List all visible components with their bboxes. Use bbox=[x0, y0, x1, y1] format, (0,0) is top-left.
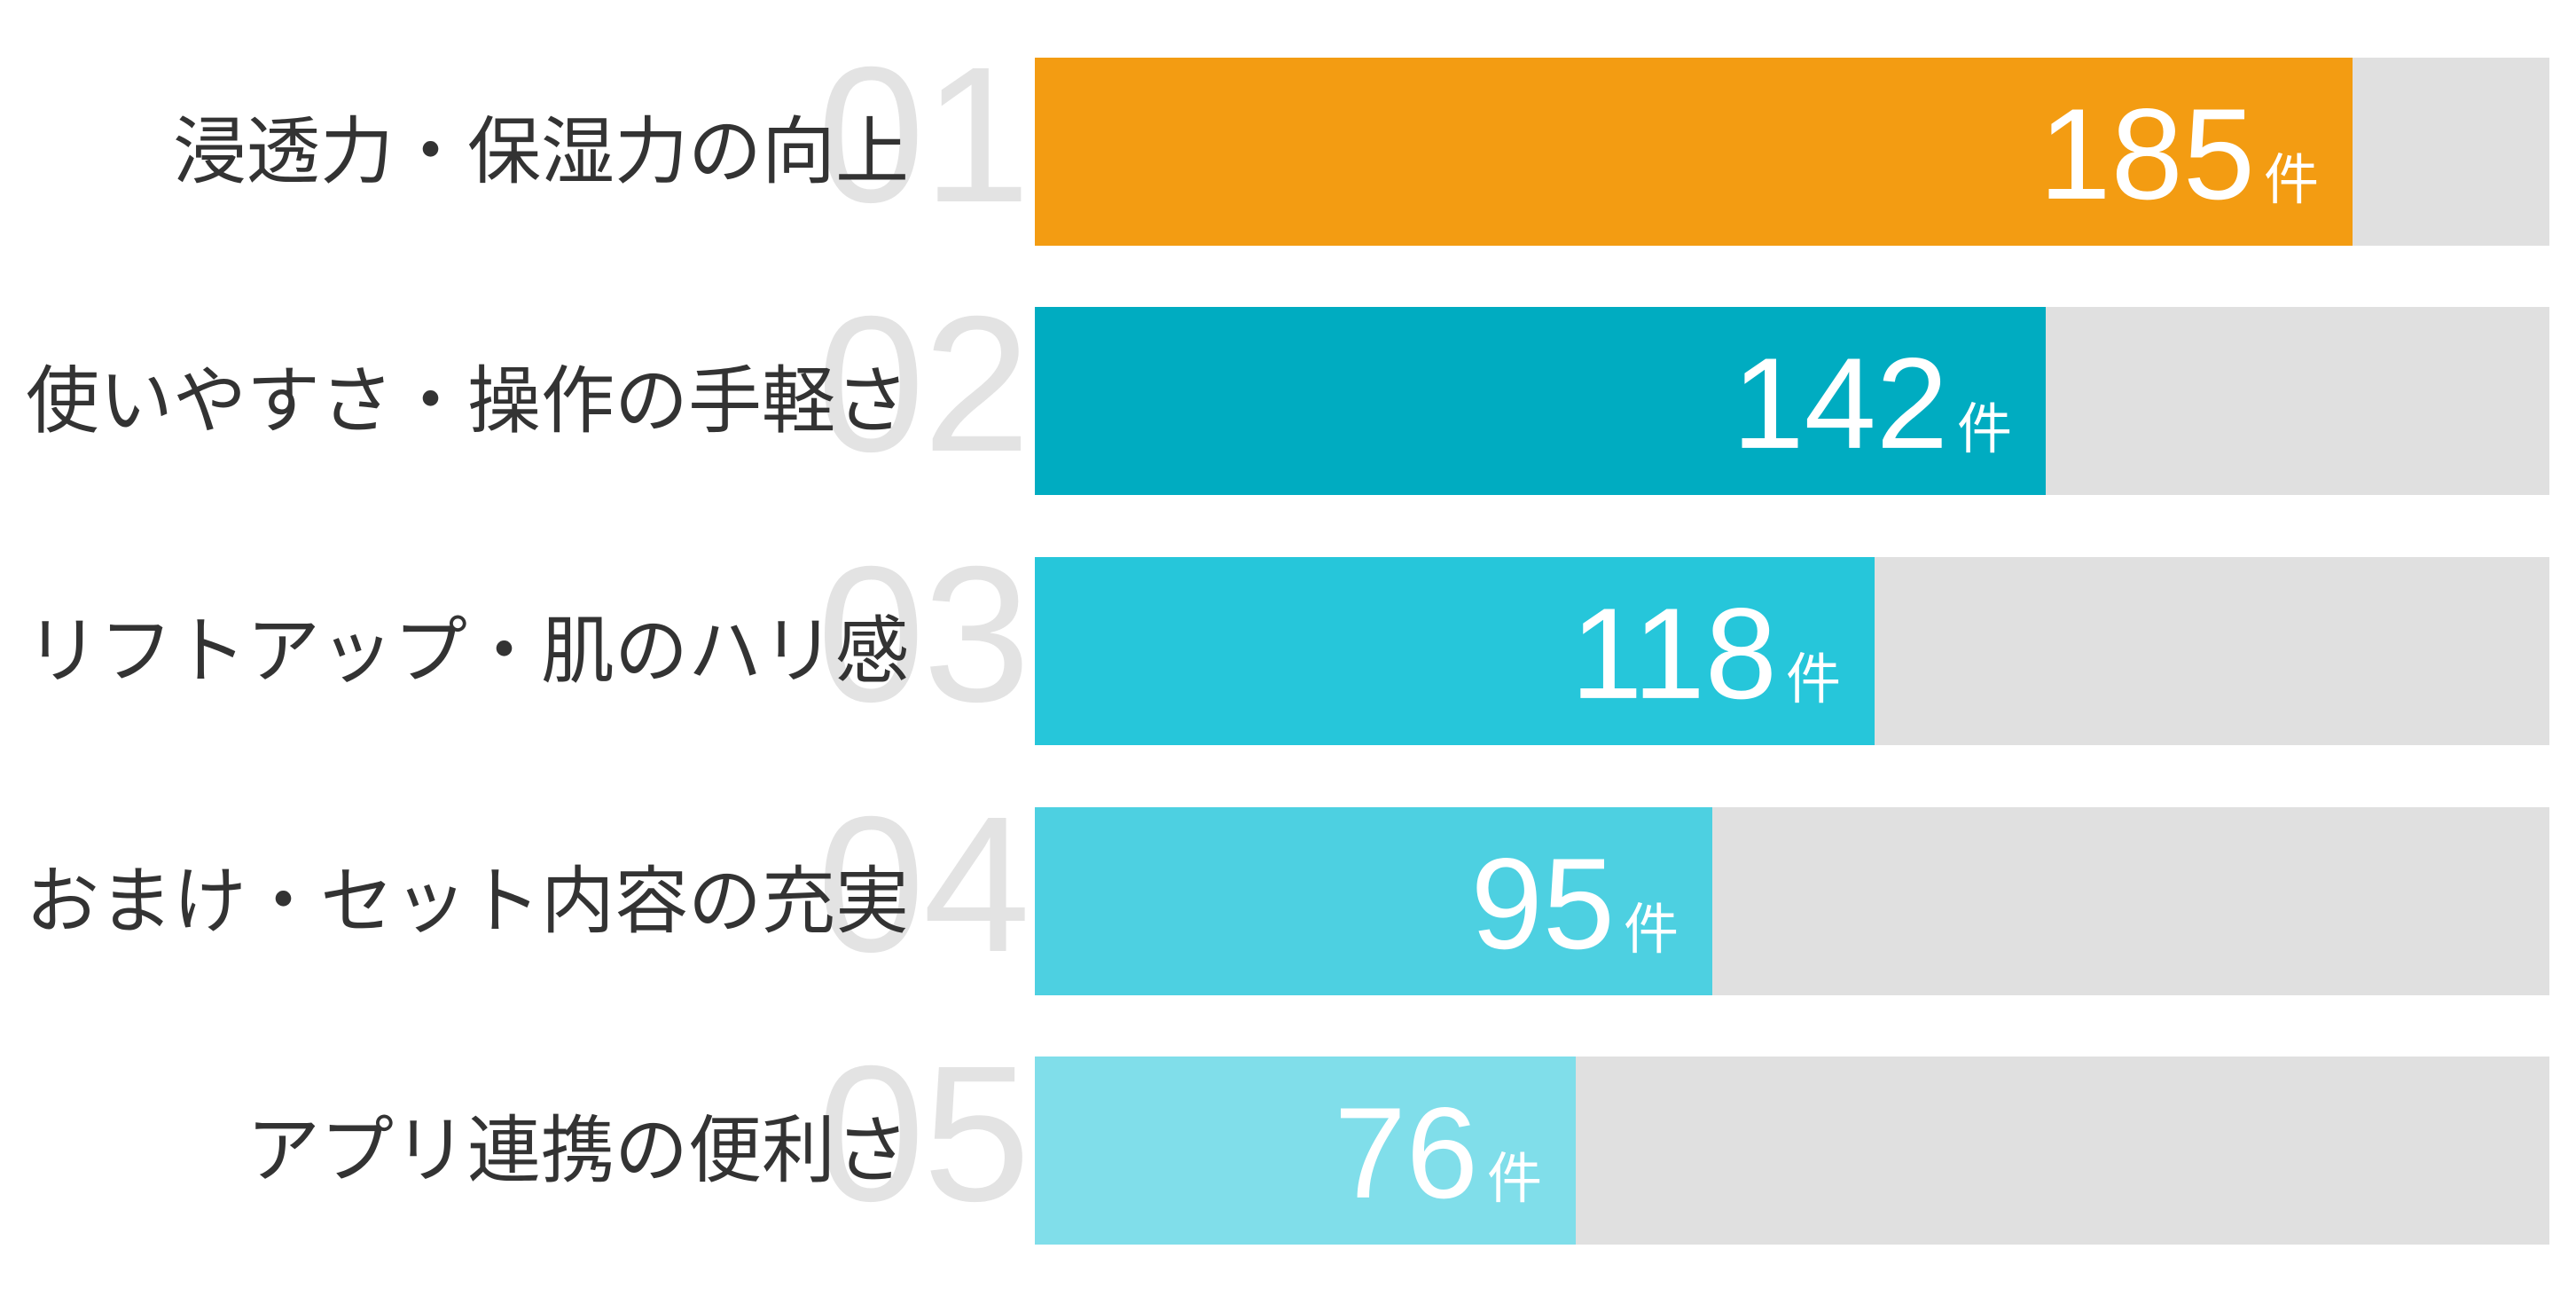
track 1 bbox=[1035, 58, 2549, 246]
bar 4: 95件 bbox=[1471, 831, 1679, 976]
row 3 bbox=[26, 527, 2549, 745]
rank number 04: 04 bbox=[818, 777, 1029, 993]
bar 4 bbox=[1035, 807, 1712, 995]
label 1: 浸透力・保湿力の向上 bbox=[173, 110, 909, 193]
bar 3: 118件 bbox=[1570, 581, 1841, 726]
track 5 bbox=[1035, 1057, 2549, 1245]
rank number 03: 03 bbox=[818, 527, 1029, 742]
track 2 bbox=[1035, 307, 2549, 495]
bar 3 bbox=[1035, 557, 1875, 745]
row 2 bbox=[26, 277, 2549, 495]
label 3: リフトアップ・肌のハリ感 bbox=[26, 610, 909, 692]
bar 1 bbox=[1035, 58, 2353, 246]
row 1 bbox=[173, 27, 2549, 246]
label 5: アプリ連携の便利さ bbox=[247, 1109, 909, 1192]
label 4: おまけ・セット内容の充実 bbox=[26, 860, 909, 942]
row 4 bbox=[26, 777, 2549, 995]
track 4 bbox=[1035, 807, 2549, 995]
row 5 bbox=[247, 1026, 2549, 1245]
track 3 bbox=[1035, 557, 2549, 745]
label 2: 使いやすさ・操作の手軽さ bbox=[26, 360, 909, 442]
rank number 05: 05 bbox=[818, 1026, 1029, 1242]
bar 2: 142件 bbox=[1732, 331, 2012, 475]
bar 1: 185件 bbox=[2039, 82, 2319, 226]
bar 5 bbox=[1035, 1057, 1576, 1245]
rank number 01: 01 bbox=[818, 27, 1029, 243]
bar 2 bbox=[1035, 307, 2046, 495]
rank number 02: 02 bbox=[818, 277, 1029, 492]
bar 5: 76件 bbox=[1335, 1080, 1542, 1225]
